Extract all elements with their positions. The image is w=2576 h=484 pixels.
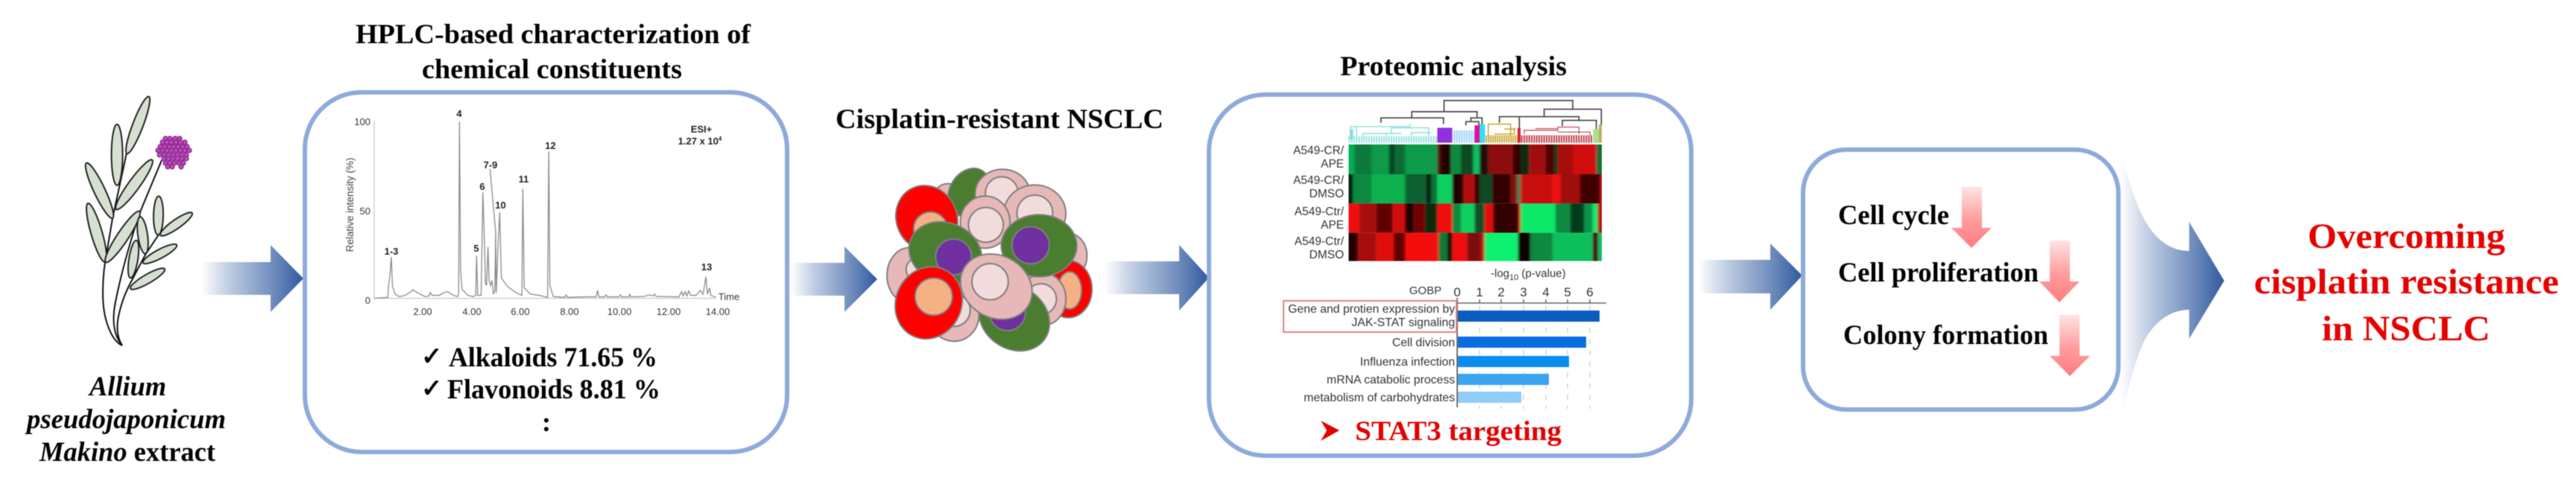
labels: heatmap rows: A549-Ctr/ <box>1295 235 1345 248</box>
text: cell cycle: Cell cycle <box>1838 200 1949 231</box>
chart: chromatogram: 0 <box>365 295 370 306</box>
list: chemical constituents: Alkaloids 71.65 % <box>449 343 657 373</box>
chart: GOBP bar chart: 4 <box>1542 285 1550 299</box>
chart: GOBP bar chart: 5 <box>1564 285 1571 299</box>
chart: chromatogram: 2.00 <box>413 306 432 317</box>
list: chemical constituents: Flavonoids 8.81 % <box>447 375 660 405</box>
chart: GOBP bar chart <box>1284 267 1606 409</box>
chart: chromatogram: 50 <box>360 206 370 217</box>
conclusion: overcoming cisplatin resistance: cisplatin resistance <box>2254 262 2559 302</box>
list: chemical constituents: : <box>542 407 551 438</box>
callout: STAT3 targeting: STAT3 targeting <box>1355 416 1562 447</box>
row: A549-Ctr/APE <box>1346 203 1604 233</box>
chart: chromatogram <box>344 108 739 317</box>
chart: chromatogram: 10.00 <box>607 306 631 317</box>
illustration: cell cluster <box>883 161 1092 364</box>
label: plant extract name: pseudojaponicum <box>25 404 226 435</box>
chart: chromatogram: 1.27 x 10 <box>678 136 719 147</box>
plant stems <box>103 153 162 346</box>
labels: GOBP terms: JAK-STAT signaling <box>1351 316 1455 329</box>
labels: heatmap rows: A549-CR/ <box>1293 174 1345 187</box>
chart: GOBP bar chart: 10 <box>1509 273 1518 282</box>
chart: chromatogram: 13 <box>701 261 712 273</box>
icon: Allium plant illustration <box>81 95 195 346</box>
chart: chromatogram: 11 <box>519 173 528 185</box>
label: plant extract name <box>25 372 226 468</box>
labels: heatmap rows: A549-Ctr/ <box>1295 206 1345 218</box>
list: chemical constituents: ✓ <box>421 342 443 372</box>
chart: protein heatmap <box>1346 144 1604 261</box>
row: A549-CR/APE <box>1346 144 1604 174</box>
chart: GOBP bar chart: GOBP <box>1409 284 1442 297</box>
arrow: plant to HPLC <box>201 245 303 312</box>
heading: HPLC characterization: chemical constituents <box>422 54 682 85</box>
heading: proteomic analysis: Proteomic analysis <box>1340 51 1567 82</box>
labels: GOBP terms: Cell division <box>1392 337 1455 349</box>
labels: heatmap rows: A549-CR/ <box>1293 144 1345 157</box>
panel: proteomic analysis <box>1209 95 1691 456</box>
chart: chromatogram: ESI+ <box>691 124 713 135</box>
arrow: cells to proteomics <box>1105 245 1209 311</box>
heading: HPLC characterization <box>356 19 751 85</box>
labels: heatmap rows: APE <box>1321 219 1344 232</box>
icon: down arrow colony formation <box>2050 315 2090 376</box>
chart: chromatogram: 10 <box>495 200 506 211</box>
chart: chromatogram: 4.00 <box>462 306 482 317</box>
text: cell proliferation: Cell proliferation <box>1838 258 2039 288</box>
purple flower cluster <box>156 136 192 169</box>
arrow: HPLC to cells <box>791 246 877 312</box>
labels: GOBP terms: metabolism of carbohydrates <box>1304 392 1455 404</box>
row: A549-Ctr/DMSO <box>1346 233 1604 261</box>
labels: heatmap rows: DMSO <box>1309 249 1344 261</box>
heading: cisplatin-resistant NSCLC: Cisplatin-resistant NSCLC <box>836 104 1164 135</box>
chart: chromatogram: Time <box>719 291 739 302</box>
labels: GOBP terms <box>1288 303 1455 404</box>
text: colony formation: Colony formation <box>1843 320 2048 351</box>
chart: chromatogram: 14.00 <box>706 306 730 317</box>
bars <box>1458 311 1600 403</box>
chart: chromatogram: 12.00 <box>657 306 681 317</box>
chart: chromatogram: 5 <box>473 243 479 254</box>
chart: GOBP bar chart: 2 <box>1497 285 1505 299</box>
list: chemical constituents <box>421 342 660 438</box>
conclusion: overcoming cisplatin resistance: in NSCLC <box>2322 309 2490 348</box>
chart: chromatogram: 1-3 <box>385 246 398 257</box>
chart: chromatogram: Relative intensity (%) <box>344 158 356 252</box>
chart: dendrogram <box>1348 101 1602 139</box>
chart: GOBP bar chart: 1 <box>1476 285 1483 299</box>
labels: GOBP terms: mRNA catabolic process <box>1327 374 1455 386</box>
plant leaves <box>81 95 195 293</box>
label: plant extract name: Allium <box>88 372 166 402</box>
label: plant extract name: Makino extract <box>39 437 216 468</box>
labels: GOBP terms: Gene and protien expression by <box>1288 303 1455 316</box>
chart: chromatogram: 7-9 <box>484 159 497 171</box>
highlight box: JAK-STAT <box>1284 301 1456 332</box>
labels: heatmap rows <box>1293 144 1345 261</box>
chart: chromatogram: 8.00 <box>560 306 579 317</box>
chart: GOBP bar chart: 6 <box>1586 285 1594 299</box>
conclusion: overcoming cisplatin resistance <box>2254 217 2559 348</box>
chart: GOBP bar chart: (p-value) <box>1518 267 1566 280</box>
icon: down arrow cell cycle <box>1951 187 1992 248</box>
labels: heatmap rows: DMSO <box>1309 188 1344 200</box>
chart: GOBP bar chart: -log <box>1491 267 1509 280</box>
list: chemical constituents: ✓ <box>421 374 443 404</box>
arrow: large curved arrow to conclusion <box>2121 153 2224 418</box>
row: A549-CR/DMSO <box>1346 174 1604 203</box>
conclusion: overcoming cisplatin resistance: Overcoming <box>2308 217 2505 256</box>
chart: GOBP bar chart: 0 <box>1453 285 1461 299</box>
chart: chromatogram: 12 <box>545 140 556 151</box>
chart: chromatogram: 4 <box>456 108 462 119</box>
chart: chromatogram: 100 <box>354 116 370 127</box>
chart: chromatogram: 6.00 <box>511 306 530 317</box>
chart: GOBP bar chart: 3 <box>1520 285 1527 299</box>
chart: chromatogram: 6 <box>479 181 485 192</box>
icon: down arrow cell proliferation <box>2039 241 2080 302</box>
arrow: proteomics to phenotype <box>1699 243 1802 310</box>
labels: GOBP terms: Influenza infection <box>1360 356 1455 369</box>
heading: HPLC characterization: HPLC-based characterization of <box>356 19 751 50</box>
panel: cellular effects <box>1803 150 2118 410</box>
labels: heatmap rows: APE <box>1321 158 1344 171</box>
chart: chromatogram: 4 <box>719 136 722 142</box>
panel: HPLC chromatogram and constituents <box>305 92 787 452</box>
